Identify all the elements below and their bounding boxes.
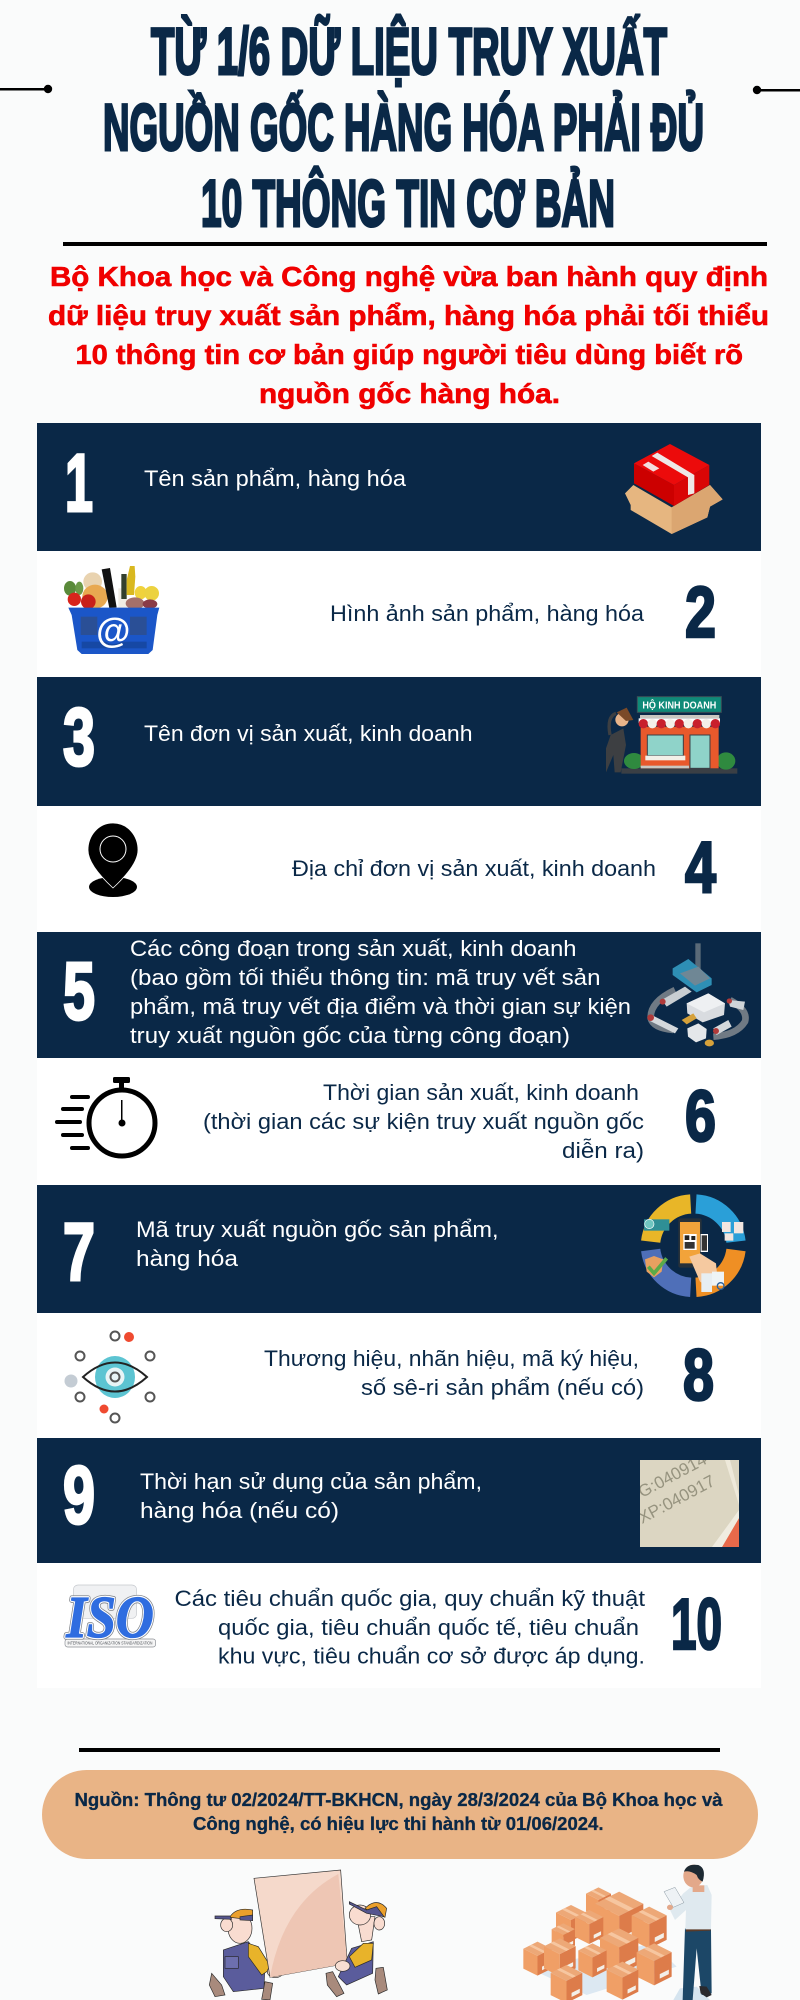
- icon: ISO logo: ISO: [65, 1584, 154, 1650]
- text: item 5: phẩm, mã truy vết địa điểm và thời gian sự kiện: [130, 994, 631, 1019]
- number 1: 1: [65, 438, 93, 529]
- text: item 10: khu vực, tiêu chuẩn cơ sở được áp dụng.: [218, 1644, 645, 1668]
- illustration: two workers carrying a board: [209, 1870, 387, 2000]
- number 9: 9: [63, 1450, 95, 1541]
- icon: ISO logo: ISO: [65, 1584, 154, 1650]
- panel: item 2: [64, 566, 716, 654]
- text: item 7: Mã truy xuất nguồn gốc sản phẩm,: [136, 1217, 498, 1242]
- icon: ISO logo: INTERNATIONAL ORGANIZATION STANDARDIZATION: [67, 1641, 152, 1646]
- intro text: nguồn gốc hàng hóa.: [259, 378, 560, 409]
- panel: item 6: [55, 1077, 716, 1163]
- image: printed expiry date on can: XP:040917: [635, 1471, 718, 1528]
- text: item 7: [136, 1217, 498, 1271]
- text: item 4: Địa chỉ đơn vị sản xuất, kinh doanh: [292, 856, 656, 881]
- number 2: 2: [685, 573, 716, 653]
- text: item 9: [140, 1469, 482, 1523]
- number 3: 3: [63, 692, 95, 783]
- stacked parcels: [523, 1887, 672, 2000]
- text: item 9: hàng hóa (nếu có): [140, 1498, 339, 1523]
- icon: shop with owner: HỘ KINH DOANH: [642, 699, 716, 711]
- panel: item 7: [37, 1185, 761, 1313]
- panel: item 10: [65, 1584, 722, 1668]
- icon: ISO logo: ISO: [65, 1584, 154, 1650]
- intro text: dữ liệu truy xuất sản phẩm, hàng hóa phải tối thiểu: [48, 300, 769, 331]
- icon: eye with dots: [64, 1332, 154, 1422]
- text: item 5: Các công đoạn trong sản xuất, kinh doanh: [130, 936, 576, 961]
- panel: item 1: [37, 423, 761, 551]
- icon: factory and logistics loop: [647, 943, 746, 1046]
- source text: Nguồn: Thông tư 02/2024/TT-BKHCN, ngày 28/3/2024 của Bộ Khoa học và: [74, 1790, 724, 1810]
- text: item 10: Các tiêu chuẩn quốc gia, quy chuẩn kỹ thuật: [174, 1586, 645, 1611]
- panel: item 4: [88, 823, 716, 908]
- panel: item 8: [64, 1332, 714, 1422]
- right title connector: [753, 86, 800, 94]
- left worker: [209, 1909, 283, 2000]
- number 5: 5: [63, 946, 95, 1037]
- icon: online shopping basket: [64, 566, 159, 654]
- footer rule: [79, 1748, 720, 1752]
- carried board: [254, 1870, 347, 1977]
- number 6: 6: [685, 1077, 716, 1157]
- text: item 5: (bao gồm tối thiểu thông tin: mã truy vết sản: [130, 965, 600, 990]
- text: item 10: [174, 1586, 645, 1668]
- text: item 8: số sê-ri sản phẩm (nếu có): [361, 1375, 644, 1400]
- panel: item 3: [37, 677, 761, 806]
- source pill: [42, 1770, 758, 1859]
- right worker: [326, 1902, 387, 1997]
- white background panel for even rows: [37, 423, 761, 1688]
- intro text: Bộ Khoa học và Công nghệ vừa ban hành quy định: [50, 261, 768, 292]
- panel: item 5: [37, 932, 761, 1058]
- title: [103, 14, 704, 240]
- icon: QR traceability wheel: [644, 1204, 743, 1292]
- icon: location pin: [88, 823, 138, 897]
- number 4: 4: [685, 828, 716, 908]
- intro text: [48, 261, 769, 409]
- number 7: 7: [63, 1207, 95, 1298]
- left title connector: [0, 85, 52, 93]
- text: item 5: truy xuất nguồn gốc của từng công đoạn): [130, 1023, 570, 1048]
- text: item 3: Tên đơn vị sản xuất, kinh doanh: [144, 721, 472, 746]
- text: item 1: Tên sản phẩm, hàng hóa: [144, 466, 407, 491]
- text: item 10: quốc gia, tiêu chuẩn quốc tế, tiêu chuẩn: [218, 1615, 639, 1640]
- text: item 6: diễn ra): [562, 1138, 644, 1163]
- text: item 9: Thời hạn sử dụng của sản phẩm,: [140, 1469, 482, 1494]
- intro text: 10 thông tin cơ bản giúp người tiêu dùng biết rõ: [76, 339, 743, 370]
- icon: online shopping basket: @: [96, 612, 130, 651]
- title rule: [63, 242, 767, 246]
- inspector figure: [664, 1865, 712, 2000]
- icon: shop with owner: [606, 697, 737, 774]
- text: item 7: hàng hóa: [136, 1246, 239, 1271]
- image: printed expiry date on can: G:040914: [635, 1450, 710, 1502]
- text: item 8: Thương hiệu, nhãn hiệu, mã ký hiệu,: [264, 1346, 639, 1371]
- illustration: inspector with stacked parcels: [523, 1865, 712, 2000]
- text: item 6: Thời gian sản xuất, kinh doanh: [323, 1080, 639, 1105]
- number 10: 10: [671, 1585, 722, 1665]
- number 8: 8: [683, 1336, 714, 1416]
- text: item 8: [264, 1346, 644, 1400]
- source text: Công nghệ, có hiệu lực thi hành từ 01/06/2024.: [193, 1814, 604, 1834]
- text: item 6: [203, 1080, 644, 1163]
- image: printed expiry date on can: [635, 1450, 739, 1547]
- text: item 2: Hình ảnh sản phẩm, hàng hóa: [330, 601, 645, 626]
- source text: [74, 1790, 724, 1834]
- icon: stopwatch with speed lines: [55, 1077, 155, 1156]
- panel: item 9: [37, 1438, 761, 1563]
- text: item 6: (thời gian các sự kiện truy xuất nguồn gốc: [203, 1109, 644, 1134]
- text: item 5: [130, 936, 631, 1048]
- floor shadow: [540, 1943, 677, 1995]
- icon: red parcel in cardboard box: [625, 444, 723, 534]
